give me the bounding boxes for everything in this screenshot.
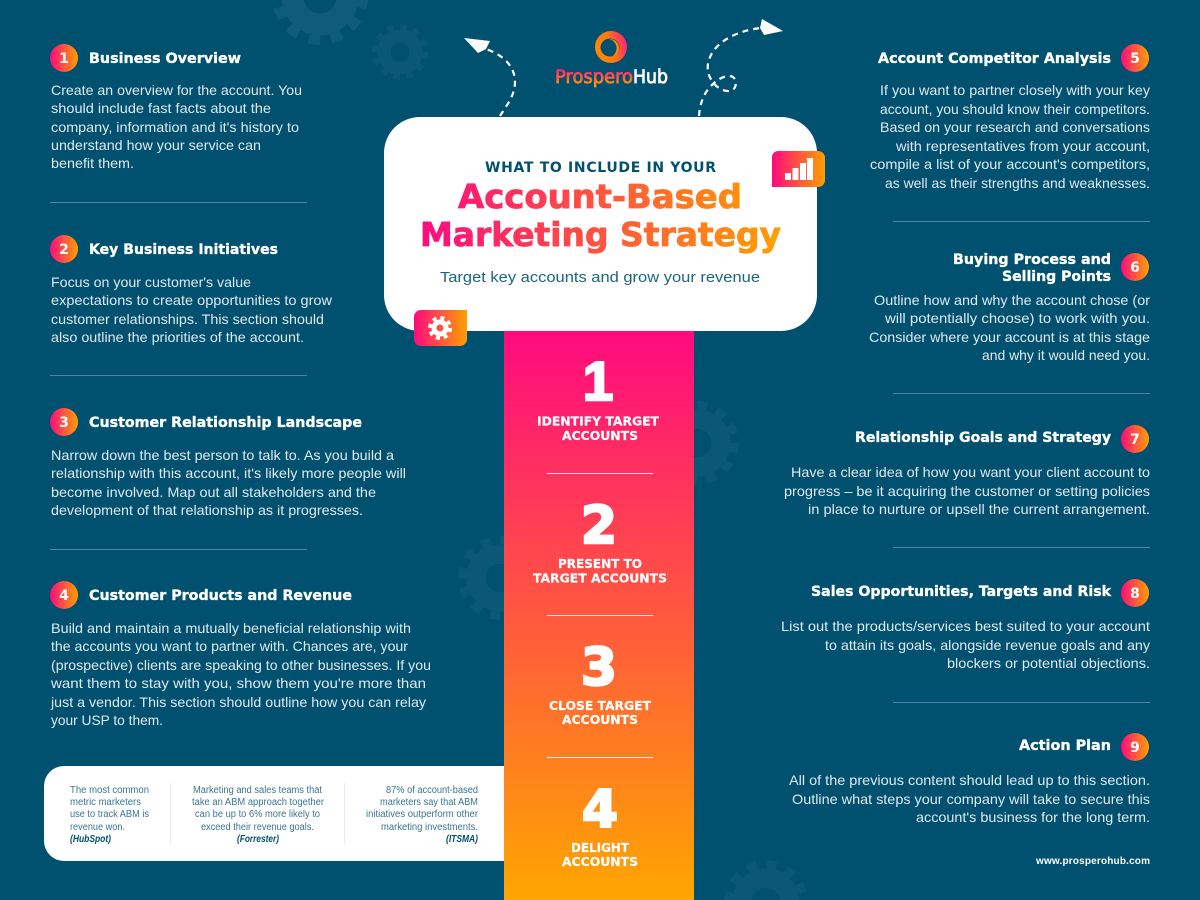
body 4: Build and maintain a mutually beneficial relationship with [51,620,411,636]
body 2: expectations to create opportunities to grow [51,292,333,308]
icon: bar chart badge [772,151,825,187]
stat: itsma [366,785,479,845]
logo [555,31,668,88]
subtitle: Target key accounts and grow your revenue [440,269,760,286]
body 3: Narrow down the best person to talk to. As you build a [51,447,394,463]
body 1: benefit them. [51,155,134,171]
step 3 [549,638,652,727]
heading 1: Business Overview [89,51,241,67]
badge 1 [50,44,78,72]
step 1: 1 [583,350,613,412]
arrow: left dashed [464,38,515,116]
background gears [277,0,804,900]
body 7: in place to nurture or upsell the current arrangement. [808,501,1150,517]
stat: forrester: (Forrester) [237,834,279,845]
stat: itsma: marketers say that ABM [380,797,478,808]
body 1: understand how your service can [51,137,261,153]
body 3: become involved. Map out all stakeholders and the [51,484,376,500]
heading 4: Customer Products and Revenue [89,588,352,604]
step 2 [533,496,667,586]
body 1 [51,82,302,171]
body 6: and why it would need you. [982,347,1150,363]
heading 6: Buying Process and [953,252,1111,268]
stat: hubspot: The most common [70,785,149,796]
section 4: customer products and revenue [50,581,431,728]
main title: Marketing Strategy [420,215,781,254]
body 9: account's business for the long term. [916,809,1150,825]
body 6 [869,292,1150,363]
step 4 [562,780,638,869]
section 3: customer relationship landscape [50,408,406,518]
badge 6 [1121,253,1149,281]
stat: forrester: take an ABM approach together [192,797,325,808]
body 4: your USP to them. [51,712,163,728]
stat: hubspot: revenue won. [70,822,125,833]
body 5: as well as their strengths and weaknesses. [885,175,1150,191]
section 7: relationship goals and strategy [784,425,1150,517]
website url: www.prosperohub.com [1035,856,1150,867]
step 3: 3 [581,638,617,698]
badge 4: 4 [59,588,69,604]
stat: forrester [192,785,325,845]
stat: hubspot [70,785,149,845]
badge 9: 9 [1130,740,1140,756]
step 1 [537,350,660,443]
badge 8 [1121,579,1149,607]
badge 3: 3 [59,415,69,431]
body 2: also outline the priorities of the account. [51,329,304,345]
body 4: want them to stay with you, show them you're more than [50,675,426,691]
body 1: Create an overview for the account. You [51,82,302,98]
step 1: ACCOUNTS [562,429,638,443]
heading 3: Customer Relationship Landscape [89,415,362,431]
panel: statistics [44,766,504,861]
body 3: relationship with this account, it's likely more people will [51,465,406,481]
heading 9: Action Plan [1019,738,1111,754]
step 2: 2 [581,496,617,556]
body 2: Focus on your customer's value [51,274,251,290]
stat: forrester: can be up to 6% more likely to [195,809,321,820]
body 7: progress – be it acquiring the customer or setting policies [784,483,1150,499]
badge 2: 2 [59,242,69,258]
heading 2: Key Business Initiatives [89,242,278,258]
section 6: buying process and selling points [869,252,1150,363]
body 5: compile a list of your account's competitors, [870,156,1150,172]
body 5: account, you should know their competitors. [880,101,1150,117]
body 6: will potentially choose) to work with you. [884,310,1150,326]
logo wordmark: Hub [633,67,668,88]
body 7: Have a clear idea of how you want your client account to [791,464,1150,480]
stat: forrester: Marketing and sales teams that [193,785,322,796]
arrow: right dashed with loop [699,19,783,116]
step 2: PRESENT TO [558,557,642,571]
step 1: IDENTIFY TARGET [537,414,660,428]
badge 7: 7 [1130,432,1140,448]
badge 2 [50,235,78,263]
main title: Account-Based [458,177,742,216]
step 3: ACCOUNTS [562,713,638,727]
body 4: just a vendor. This section should outline how you can relay [50,694,426,710]
body 8: blockers or potential objections. [947,655,1150,671]
body 8: List out the products/services best suited to your account [781,618,1150,634]
section 8: sales opportunities, targets and risk [781,579,1150,671]
body 4: the accounts you want to partner with. Chances are, your [51,638,408,654]
stat: itsma: (ITSMA) [446,834,478,845]
heading 5: Account Competitor Analysis [878,51,1111,67]
heading 7: Relationship Goals and Strategy [855,430,1112,446]
body 8: to attain its goals, alongside revenue goals and any [825,637,1150,653]
badge 9 [1121,733,1149,761]
body 8 [781,618,1150,671]
body 5 [870,82,1150,191]
body 4: (prospective) clients are speaking to other businesses. If you [51,657,431,673]
heading 6 [953,252,1111,285]
stat: hubspot: use to track ABM is [70,809,149,820]
body 7 [784,464,1150,517]
badge 3 [50,408,78,436]
body 3 [51,447,406,518]
body 2 [51,274,333,345]
body 6: Consider where your account is at this stage [869,329,1150,345]
stat: itsma: marketing investments. [381,822,478,833]
body 9: All of the previous content should lead up to this section. [789,772,1150,788]
body 4 [50,620,431,728]
step 2: TARGET ACCOUNTS [533,572,667,586]
body 1: should include fast facts about the [51,100,271,116]
step 4: DELIGHT [571,841,630,855]
step 3: CLOSE TARGET [549,699,652,713]
body 6: Outline how and why the account chose (or [874,292,1150,308]
stat: hubspot: metric marketers [70,797,141,808]
logo wordmark: Prospero [555,67,633,88]
body 5: If you want to partner closely with your key [880,82,1150,98]
icon: gear badge [414,310,467,346]
section 2: key business initiatives [50,235,333,345]
body 1: company, information and it's history to [51,119,299,135]
stat: itsma: 87% of account-based [386,785,478,796]
badge 5 [1121,44,1149,72]
main title [420,177,781,254]
section 1: business overview [50,44,302,171]
step 4: 4 [582,780,618,840]
section 9: action plan [789,733,1150,825]
stat: forrester: exceed their revenue goals. [201,822,314,833]
body 9: Outline what steps your company will take to secure this [792,791,1150,807]
heading 8: Sales Opportunities, Targets and Risk [811,584,1111,600]
heading 6: Selling Points [1002,269,1111,285]
badge 1: 1 [59,51,69,67]
section 5: account competitor analysis [870,44,1150,191]
body 2: customer relationships. This section should [51,311,324,327]
panel: title card [384,117,825,346]
body 5: Based on your research and conversations [880,119,1150,135]
eyebrow: WHAT TO INCLUDE IN YOUR [485,160,716,176]
step 4: ACCOUNTS [562,855,638,869]
badge 4 [50,581,78,609]
central gradient bar [504,331,694,900]
body 9 [789,772,1150,825]
stat: hubspot: (HubSpot) [70,834,111,845]
body 5: with representatives from your account, [895,138,1150,154]
stat: itsma: initiatives outperform other [366,809,479,820]
badge 8: 8 [1130,586,1140,602]
logo ring [595,31,627,63]
badge 5: 5 [1130,51,1140,67]
badge 7 [1121,425,1149,453]
body 3: development of that relationship as it progresses. [51,502,363,518]
badge 6: 6 [1130,260,1140,276]
